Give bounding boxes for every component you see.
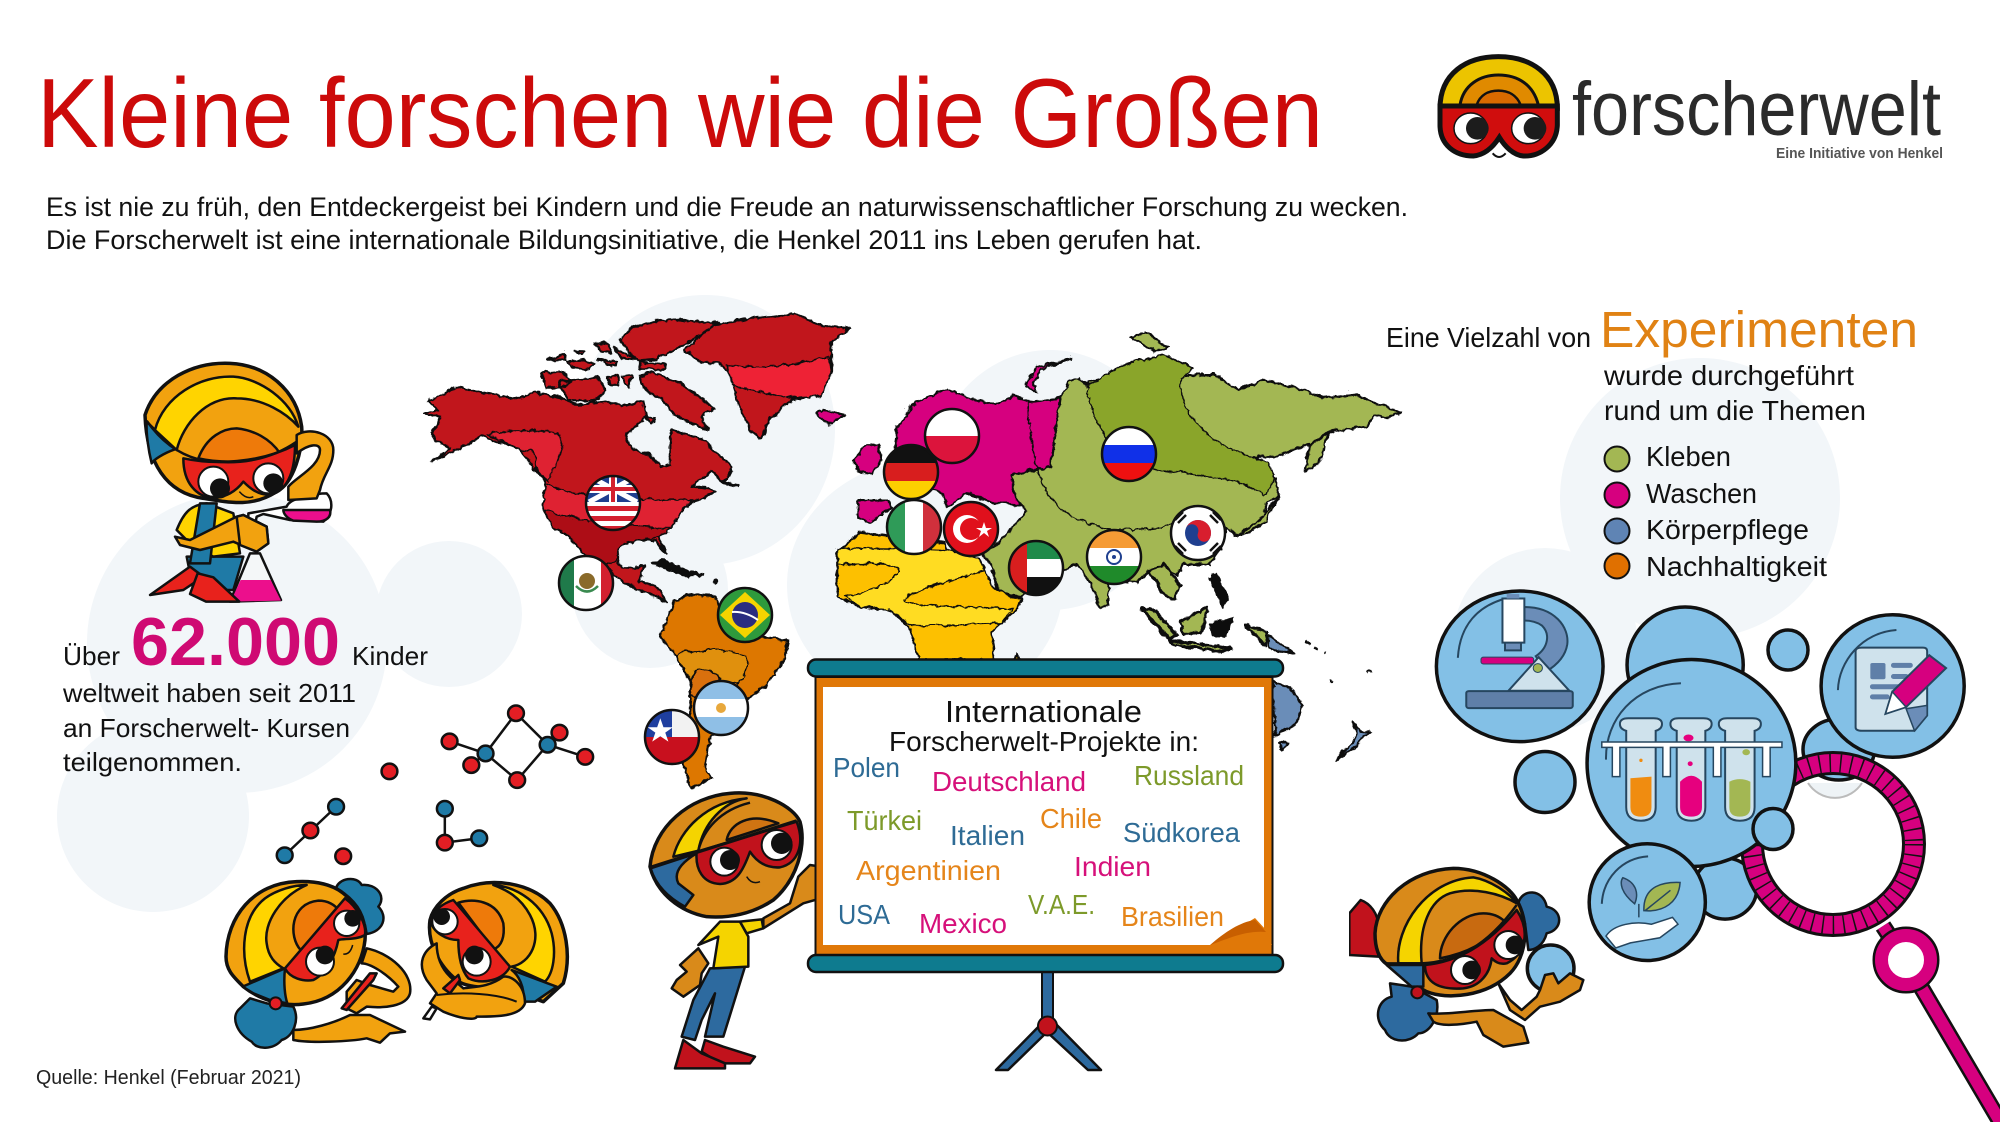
- bubble: plant in hand: [1589, 844, 1705, 961]
- shirt: [177, 503, 240, 557]
- Greenland: [683, 313, 848, 437]
- country word cloud: Indien: [1074, 851, 1151, 882]
- South America: [660, 593, 787, 787]
- country word cloud: USA: [838, 899, 890, 930]
- Africa: [836, 531, 1020, 659]
- experiments heading: Eine Vielzahl von: [1386, 322, 1591, 353]
- bubble: small on ring: [1753, 808, 1793, 850]
- bubble: small left: [1515, 752, 1575, 812]
- bubbles behind wand: [1627, 607, 1875, 919]
- character: kid thinking: [422, 883, 567, 1019]
- legend item: Waschen: Waschen: [1646, 478, 1757, 509]
- country word cloud: [833, 752, 1244, 939]
- character: girl with bubble: [1349, 868, 1583, 1047]
- country word cloud: Mexico: [919, 908, 1007, 939]
- flag: India: [1087, 530, 1141, 584]
- bubble: small: [1768, 630, 1808, 670]
- board stand: [996, 972, 1101, 1070]
- flag: Poland: [925, 409, 979, 463]
- country word cloud: Deutschland: [932, 766, 1086, 797]
- Europe: [852, 357, 1070, 522]
- intro text: Es ist nie zu früh, den Entdeckergeist bei Kindern und die Freude an naturwissenschaftlicher Forschung zu wecken.: [46, 192, 1408, 222]
- board heading: [889, 694, 1199, 757]
- flag: Chile: [645, 710, 699, 764]
- head: [1375, 868, 1525, 996]
- bubble: test tubes: [1587, 660, 1796, 867]
- flag: UAE: [1009, 541, 1063, 595]
- Asia: [981, 331, 1399, 650]
- shoes: [702, 1040, 755, 1063]
- board frame: [816, 677, 1272, 955]
- bubble: microscope: [1436, 591, 1603, 742]
- eyes: [432, 909, 458, 934]
- flask: [230, 553, 281, 602]
- country word cloud: Italien: [950, 820, 1025, 851]
- flag: Brazil: [718, 588, 772, 642]
- arm holding bubble: [1498, 973, 1583, 1020]
- character: kid with flask: [145, 363, 333, 602]
- pale background circles: [57, 295, 1840, 912]
- country word cloud: Russland: [1134, 760, 1244, 791]
- logo mascot icon: [1440, 57, 1557, 157]
- world map: [423, 313, 1399, 787]
- legs: [682, 967, 745, 1040]
- legs and shoes: [187, 557, 243, 590]
- flag: Germany: [884, 445, 938, 499]
- country word cloud: Türkei: [847, 805, 922, 836]
- shirt: [698, 922, 748, 968]
- stat text: teilgenommen.: [63, 747, 242, 777]
- flag: Mexico: [559, 556, 613, 610]
- board inner white: [823, 687, 1264, 945]
- board top bar: [808, 660, 1283, 676]
- head: [145, 363, 302, 503]
- wand ring: [1752, 763, 1914, 925]
- logo: forscherwelt: [1440, 57, 1943, 162]
- raised arm: [763, 865, 832, 928]
- title: Kleine forschen wie die Großen: [37, 58, 1323, 168]
- faint bubble inside wand: [1808, 783, 1862, 798]
- country word cloud: V.A.E.: [1028, 889, 1095, 920]
- stat text: weltweit haben seit 2011: [62, 678, 356, 708]
- experiments heading: rund um die Themen: [1604, 395, 1866, 426]
- legend item: Kleben: Kleben: [1646, 441, 1731, 472]
- board heading: Internationale: [945, 694, 1142, 729]
- character: girl with pencil: [226, 879, 410, 1048]
- head: [226, 882, 365, 1005]
- flag: Russia: [1102, 427, 1156, 481]
- left arm: [672, 948, 708, 997]
- head: [650, 793, 802, 917]
- arm holding tube: [175, 515, 268, 552]
- Australia and New Zealand: [1267, 634, 1372, 759]
- eyes: [334, 911, 359, 936]
- bubble: document and pencil: [1821, 615, 1964, 757]
- Americas: [423, 313, 848, 787]
- country word cloud: Polen: [833, 752, 900, 783]
- legend: topics: [1604, 441, 1827, 582]
- stat text: Über: [63, 641, 120, 671]
- arms: [422, 943, 525, 1019]
- flask tube and bulb: [248, 493, 331, 525]
- stat text: [62, 604, 428, 777]
- eyes: [198, 467, 228, 497]
- intro text: Die Forscherwelt ist eine internationale Bildungsinitiative, die Henkel 2011 ins Leben gerufen hat.: [46, 225, 1202, 255]
- flag: Turkey: [944, 502, 998, 556]
- board bottom bar: [808, 955, 1283, 972]
- bubble in hand: [1527, 945, 1574, 992]
- hair bow: [1349, 900, 1378, 957]
- stat text: Kinder: [352, 641, 428, 671]
- lower arm: [1428, 1010, 1528, 1047]
- source note: Quelle: Henkel (Februar 2021): [36, 1067, 301, 1089]
- eyes: [1451, 956, 1479, 984]
- board heading: Forscherwelt-Projekte in:: [889, 726, 1199, 757]
- hair dot: [1411, 986, 1423, 998]
- experiments heading: wurde durchgeführt: [1603, 360, 1854, 391]
- bubbles and bubble wand: [1436, 591, 2000, 1122]
- flag: Argentina: [694, 681, 748, 735]
- arms: [293, 1015, 405, 1043]
- flag: Italy: [887, 500, 941, 554]
- character: presenter kid: [650, 793, 832, 1068]
- logo wordmark: forscherwelt: [1572, 67, 1941, 152]
- logo tagline: Eine Initiative von Henkel: [1776, 146, 1943, 162]
- eyes: [710, 848, 738, 876]
- wand stem: [1882, 926, 2000, 1122]
- hand and handle arm: [288, 431, 333, 500]
- country word cloud: Argentinien: [856, 855, 1001, 886]
- pencil: [342, 973, 377, 1010]
- hair dot: [270, 997, 282, 1009]
- Eurasia, Africa, Oceania: [836, 331, 1399, 759]
- presentation board: [808, 660, 1283, 1070]
- hair buns: [336, 879, 383, 934]
- North America: [423, 318, 737, 602]
- flag: USA: [586, 476, 640, 530]
- pencil: [443, 975, 460, 993]
- Iceland: [815, 408, 843, 423]
- country word cloud: Brasilien: [1121, 901, 1224, 932]
- country word cloud: Südkorea: [1123, 817, 1240, 848]
- flag: South Korea: [1171, 506, 1225, 560]
- flags: [559, 409, 1225, 764]
- hair buns: [1518, 892, 1559, 950]
- highlight word: Experimenten: [1600, 301, 1918, 358]
- page curl: [1210, 918, 1272, 945]
- stat number: 62.000: [131, 604, 340, 680]
- intro text: [46, 192, 1408, 255]
- head: [429, 883, 567, 1002]
- stat text: an Forscherwelt- Kursen: [63, 713, 350, 743]
- legend item: Kleben: [1604, 441, 1731, 472]
- legend item: Körperpflege: Körperpflege: [1646, 514, 1809, 545]
- legend item: Nachhaltigkeit: Nachhaltigkeit: [1646, 551, 1827, 582]
- experiments heading: [1386, 301, 1918, 426]
- country word cloud: Chile: [1040, 803, 1102, 834]
- molecules: [277, 705, 593, 864]
